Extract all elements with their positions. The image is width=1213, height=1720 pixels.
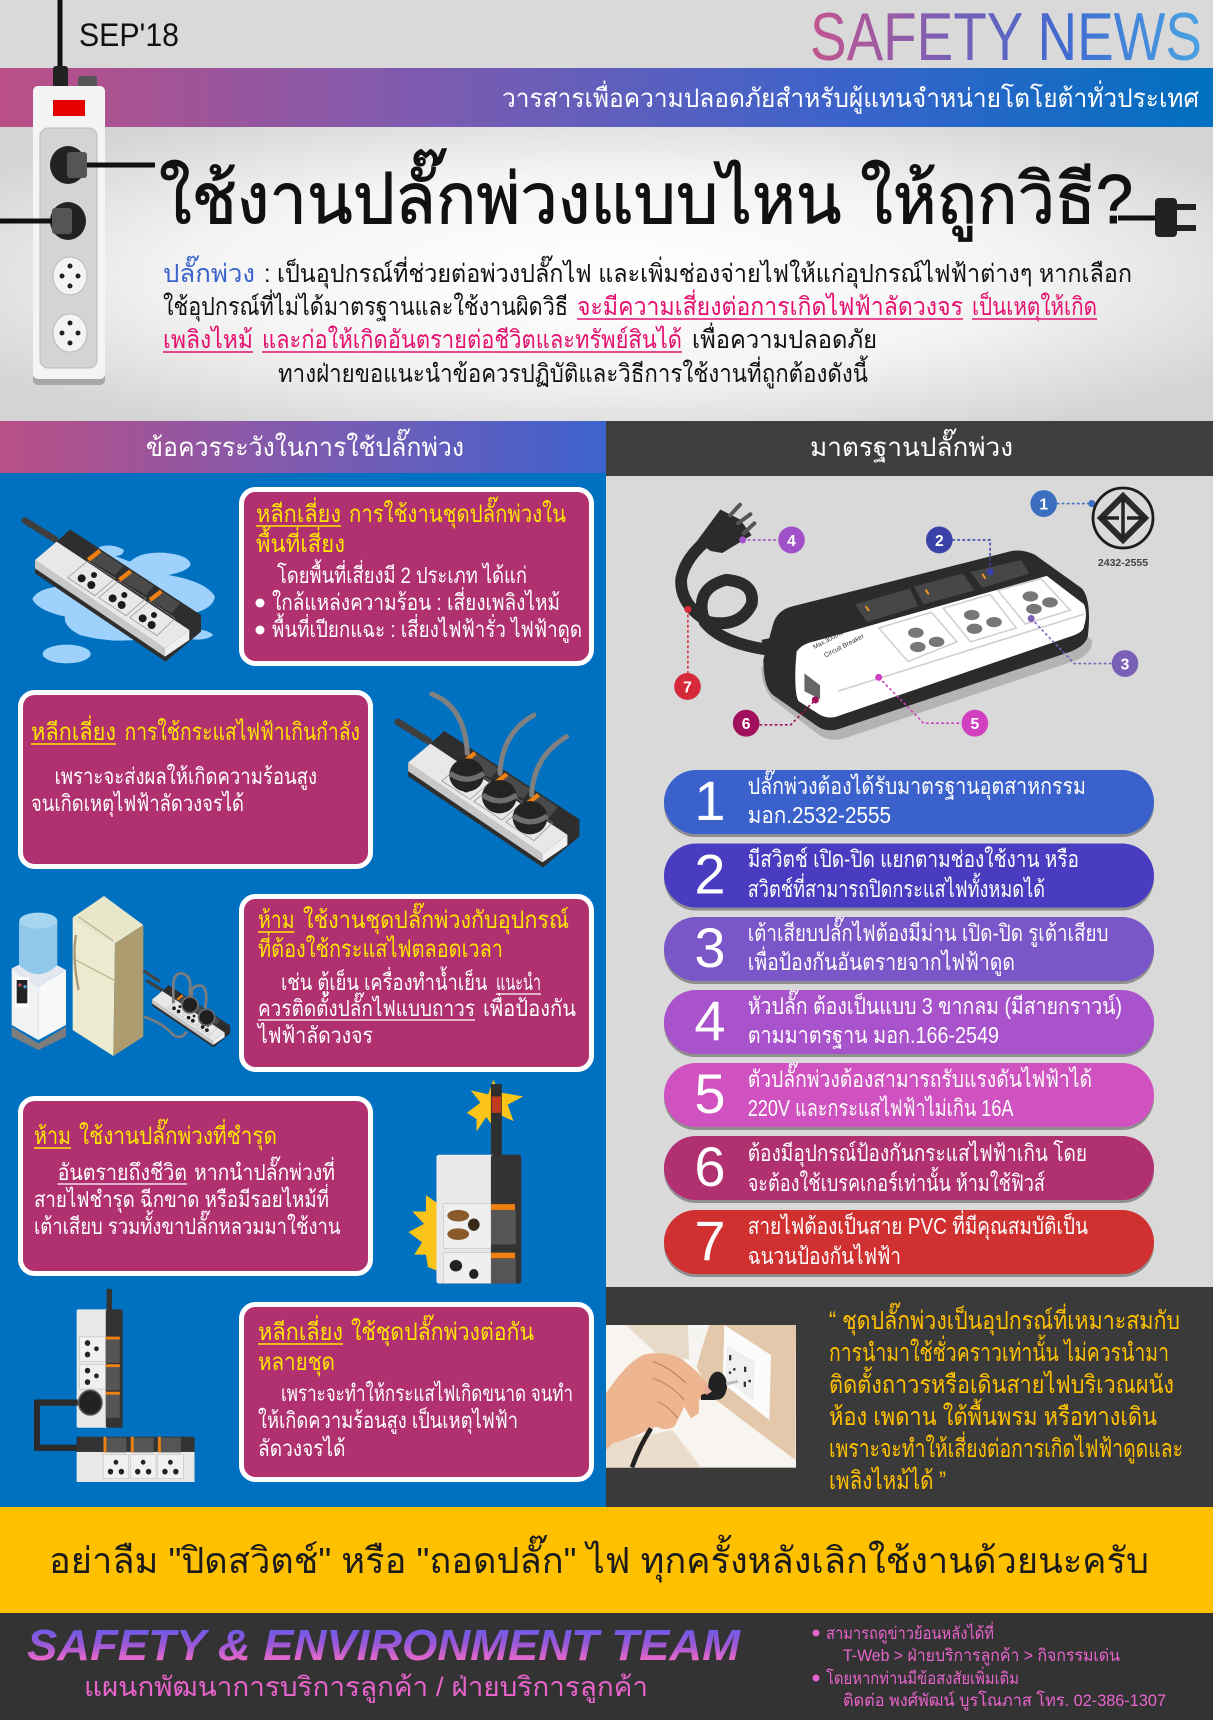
callout 3: always-on appliances: เช่น ตู้เย็น เครื่องทำน้ำเย็น bbox=[281, 966, 488, 996]
standard 4 bbox=[664, 989, 1154, 1057]
section header: precautions: ข้อควรระวังในการใช้ปลั๊กพ่วง bbox=[146, 428, 464, 462]
callout 3: always-on appliances bbox=[242, 896, 592, 1070]
diagram: labelled power strip: Total 16A / 250V bbox=[805, 618, 849, 646]
main heading: ใช้งานปลั๊กพ่วงแบบไหน ให้ถูกวิธี? bbox=[159, 149, 1133, 242]
diagram: labelled power strip: 6 bbox=[742, 716, 751, 733]
standard 7: 7 bbox=[694, 1209, 726, 1272]
standard 6: จะต้องใช้เบรคเกอร์เท่านั้น ห้ามใช้ฟิวส์ bbox=[748, 1167, 1045, 1196]
standard 3: เพื่อป้องกันอันตรายจากไฟฟ้าดูด bbox=[748, 946, 1015, 976]
top header background bbox=[0, 0, 1213, 68]
contact information: T-Web > ฝ่ายบริการลูกค้า > กิจกรรมเด่น bbox=[843, 1646, 1120, 1666]
intro panel background bbox=[0, 127, 1213, 421]
intro paragraph bbox=[163, 255, 1132, 389]
intro paragraph: ใช้อุปกรณ์ที่ไม่ได้มาตรฐานและใช้งานผิดวิธี bbox=[163, 289, 568, 322]
callout 4: damaged strip: ใช้งานปลั๊กพ่วงที่ชำรุด bbox=[79, 1118, 277, 1151]
magazine date: SEP'18 bbox=[79, 17, 179, 53]
reminder banner bbox=[0, 1507, 1213, 1613]
standard 4: ตามมาตรฐาน มอก.166-2549 bbox=[748, 1022, 999, 1049]
standard 4: หัวปลั๊ก ต้องเป็นแบบ 3 ขากลม (มีสายกราวน์) bbox=[748, 989, 1122, 1019]
intro paragraph: : เป็นอุปกรณ์ที่ช่วยต่อพ่วงปลั๊กไฟ และเพิ่มช่องจ่ายไฟให้แก่อุปกรณ์ไฟฟ้าต่างๆ หากเลือก bbox=[264, 255, 1132, 289]
diagram: labelled power strip: 7 bbox=[683, 679, 692, 696]
intro paragraph: ปลั๊กพ่วง bbox=[163, 255, 255, 288]
standard 5: 220V และกระแสไฟฟ้าไม่เกิน 16A bbox=[748, 1095, 1014, 1121]
callout 2: overload: จนเกิดเหตุไฟฟ้าลัดวงจรได้ bbox=[31, 790, 244, 817]
contact information: สามารถดูข่าวย้อนหลังได้ที่ bbox=[826, 1621, 994, 1644]
callout 5: chained strips: หลีกเลี่ยง bbox=[258, 1315, 343, 1346]
quote text bbox=[829, 1302, 1183, 1495]
diagram: labelled power strip: 4 bbox=[787, 533, 796, 550]
diagram: labelled power strip: 1 bbox=[1039, 496, 1048, 514]
callout 1: risky areas: หลีกเลี่ยง bbox=[256, 497, 341, 528]
intro paragraph: เป็นเหตุให้เกิด bbox=[972, 291, 1097, 322]
section header: precautions bbox=[0, 421, 606, 473]
callout 2: overload: หลีกเลี่ยง bbox=[31, 715, 116, 746]
callout 4: damaged strip: อันตรายถึงชีวิต bbox=[58, 1160, 187, 1185]
standard 7: ฉนวนป้องกันไฟฟ้า bbox=[748, 1243, 901, 1269]
team name: SAFETY & ENVIRONMENT TEAM bbox=[27, 1621, 741, 1670]
illustration: water cooler and refrigerator bbox=[12, 896, 230, 1056]
standard 5: ตัวปลั๊กพ่วงต้องสามารถรับแรงดันไฟฟ้าได้ bbox=[748, 1062, 1092, 1092]
illustration: daisy-chained strips bbox=[37, 1289, 195, 1482]
callout 2: overload: เพราะจะส่งผลให้เกิดความร้อนสูง bbox=[54, 764, 317, 790]
standard 3 bbox=[664, 916, 1154, 984]
contact information bbox=[812, 1621, 1166, 1711]
callout 4: damaged strip: ห้าม bbox=[34, 1123, 71, 1150]
standard 5 bbox=[664, 1062, 1154, 1130]
standard 2: สวิตช์ที่สามารถปิดกระแสไฟทั้งหมดได้ bbox=[748, 873, 1045, 902]
callout 1: risky areas: ใกล้แหล่งความร้อน : เสี่ยงเพลิงไหม้ bbox=[272, 586, 560, 615]
diagram: labelled power strip: 3 bbox=[1121, 656, 1130, 673]
callout 1: risky areas: พื้นที่เสี่ยง bbox=[256, 526, 345, 558]
diagram: labelled power strip: Circuit Breaker bbox=[823, 633, 866, 659]
callout 5: chained strips: หลายชุด bbox=[258, 1349, 335, 1377]
panel: quote bbox=[606, 1287, 1213, 1507]
callout 2: overload: การใช้กระแสไฟฟ้าเกินกำลัง bbox=[124, 718, 360, 746]
callout 1: risky areas bbox=[242, 490, 592, 664]
diagram: labelled power strip bbox=[674, 490, 1138, 740]
callout 2: overload bbox=[20, 692, 370, 866]
illustration: damaged strip with sparks bbox=[408, 1080, 523, 1283]
section header: standards bbox=[606, 421, 1213, 476]
callout 5: chained strips: เพราะจะทำให้กระแสไฟเกิดขนาด จนทำ bbox=[281, 1380, 573, 1406]
callout 4: damaged strip: เต้าเสียบ รวมทั้งขาปลั๊กหลวมมาใช้งาน bbox=[34, 1210, 340, 1239]
intro paragraph: ทางฝ่ายขอแนะนำข้อควรปฏิบัติและวิธีการใช้งานที่ถูกต้องดังนี้ bbox=[278, 355, 868, 389]
standard 2 bbox=[664, 842, 1154, 910]
illustration: overloaded strip with plugs bbox=[398, 694, 579, 867]
icon: wall power strip with plugs bbox=[0, 0, 155, 385]
subtitle band bbox=[0, 68, 1213, 127]
callout 4: damaged strip bbox=[20, 1098, 370, 1274]
contact information: โดยหากท่านมีข้อสงสัยเพิ่มเติม bbox=[826, 1666, 1019, 1688]
callout 3: always-on appliances: ที่ต้องใช้กระแสไฟตลอดเวลา bbox=[258, 932, 503, 963]
contact information: ติดต่อ พงศ์พัฒน์ บูรโณภาส โทร. 02-386-1307 bbox=[843, 1690, 1166, 1711]
footer bbox=[0, 1613, 1213, 1720]
standard 2: 2 bbox=[694, 842, 726, 906]
callout 5: chained strips bbox=[242, 1304, 592, 1480]
standard mark logo bbox=[1093, 488, 1153, 569]
intro paragraph: และก่อให้เกิดอันตรายต่อชีวิตและทรัพย์สินได้ bbox=[262, 325, 682, 354]
callout 3: always-on appliances: ห้าม bbox=[258, 907, 294, 934]
callout 4: damaged strip: หากนำปลั๊กพ่วงที่ bbox=[194, 1156, 335, 1185]
panel: standards bbox=[606, 476, 1213, 1283]
callout 4: damaged strip: สายไฟชำรุด ฉีกขาด หรือมีรอยไหม้ที่ bbox=[34, 1183, 329, 1213]
standard 7: สายไฟต้องเป็นสาย PVC ที่มีคุณสมบัติเป็น bbox=[748, 1210, 1088, 1240]
intro paragraph: เพื่อความปลอดภัย bbox=[692, 322, 877, 354]
standard 2: มีสวิตช์ เปิด-ปิด แยกตามช่องใช้งาน หรือ bbox=[748, 846, 1079, 872]
callout 1: risky areas: โดยพื้นที่เสี่ยงมี 2 ประเภท ได้แก่ bbox=[277, 559, 527, 588]
standard 3: เต้าเสียบปลั๊กไฟต้องมีม่าน เปิด-ปิด รูเต้าเสียบ bbox=[748, 916, 1108, 947]
callout 5: chained strips: ใช้ชุดปลั๊กพ่วงต่อกัน bbox=[351, 1314, 534, 1347]
callout 1: risky areas: การใช้งานชุดปลั๊กพ่วงใน bbox=[349, 496, 566, 529]
intro paragraph: จะมีความเสี่ยงต่อการเกิดไฟฟ้าลัดวงจร bbox=[577, 289, 963, 321]
callout 3: always-on appliances: ไฟฟ้าลัดวงจร bbox=[256, 1022, 373, 1048]
callout 3: always-on appliances: เพื่อป้องกัน bbox=[483, 992, 576, 1021]
standard 4: 4 bbox=[694, 989, 726, 1052]
reminder banner: อย่าลืม "ปิดสวิตช์" หรือ "ถอดปลั๊ก" ไฟ ทุกครั้งหลังเลิกใช้งานด้วยนะครับ bbox=[49, 1534, 1149, 1583]
standard 6: ต้องมีอุปกรณ์ป้องกันกระแสไฟฟ้าเกิน โดย bbox=[748, 1140, 1087, 1167]
standard 6 bbox=[664, 1135, 1154, 1203]
standard 1: มอก.2532-2555 bbox=[748, 802, 891, 828]
quote text: เพลิงไหม้ได้ ” bbox=[829, 1466, 946, 1495]
callout 1: risky areas: พื้นที่เปียกแฉะ : เสี่ยงไฟฟ้ารั่ว ไฟฟ้าดูด bbox=[272, 613, 582, 643]
standard 1 bbox=[664, 769, 1154, 837]
standard 1: 1 bbox=[694, 769, 726, 832]
department: แผนกพัฒนาการบริการลูกค้า / ฝ่ายบริการลูกค้า bbox=[84, 1672, 648, 1703]
panel: precautions bbox=[0, 473, 606, 1507]
standard mark logo: 2432-2555 bbox=[1098, 557, 1148, 569]
diagram: labelled power strip: 2 bbox=[935, 533, 944, 550]
illustration: power strip on puddle bbox=[25, 521, 215, 663]
callout 5: chained strips: ลัดวงจรได้ bbox=[258, 1435, 346, 1461]
standard 3: 3 bbox=[694, 916, 726, 979]
diagram: labelled power strip: Max.3000W bbox=[812, 629, 845, 651]
callout 3: always-on appliances: ใช้งานชุดปลั๊กพ่วงกับอุปกรณ์ bbox=[303, 902, 569, 935]
diagram: labelled power strip: 5 bbox=[971, 716, 979, 733]
quote text: ห้อง เพดาน ใต้พื้นพรม หรือทางเดิน bbox=[829, 1398, 1157, 1431]
photo: hand plugging into wall socket bbox=[606, 1325, 796, 1468]
standard 6: 6 bbox=[694, 1135, 726, 1198]
callout 3: always-on appliances: ควรติดตั้งปลั๊กไฟแบบถาวร bbox=[258, 992, 475, 1021]
intro paragraph: เพลิงไหม้ bbox=[163, 325, 253, 354]
icon: loose plug bbox=[1118, 198, 1196, 237]
callout 5: chained strips: ให้เกิดความร้อนสูง เป็นเหตุไฟฟ้า bbox=[258, 1406, 518, 1434]
standard 5: 5 bbox=[694, 1062, 726, 1125]
callout 3: always-on appliances: แนะนำ bbox=[496, 970, 541, 995]
standard 1: ปลั๊กพ่วงต้องได้รับมาตรฐานอุตสาหกรรม bbox=[748, 769, 1086, 800]
standard 7 bbox=[664, 1209, 1154, 1277]
section header: standards: มาตรฐานปลั๊กพ่วง bbox=[810, 428, 1013, 463]
